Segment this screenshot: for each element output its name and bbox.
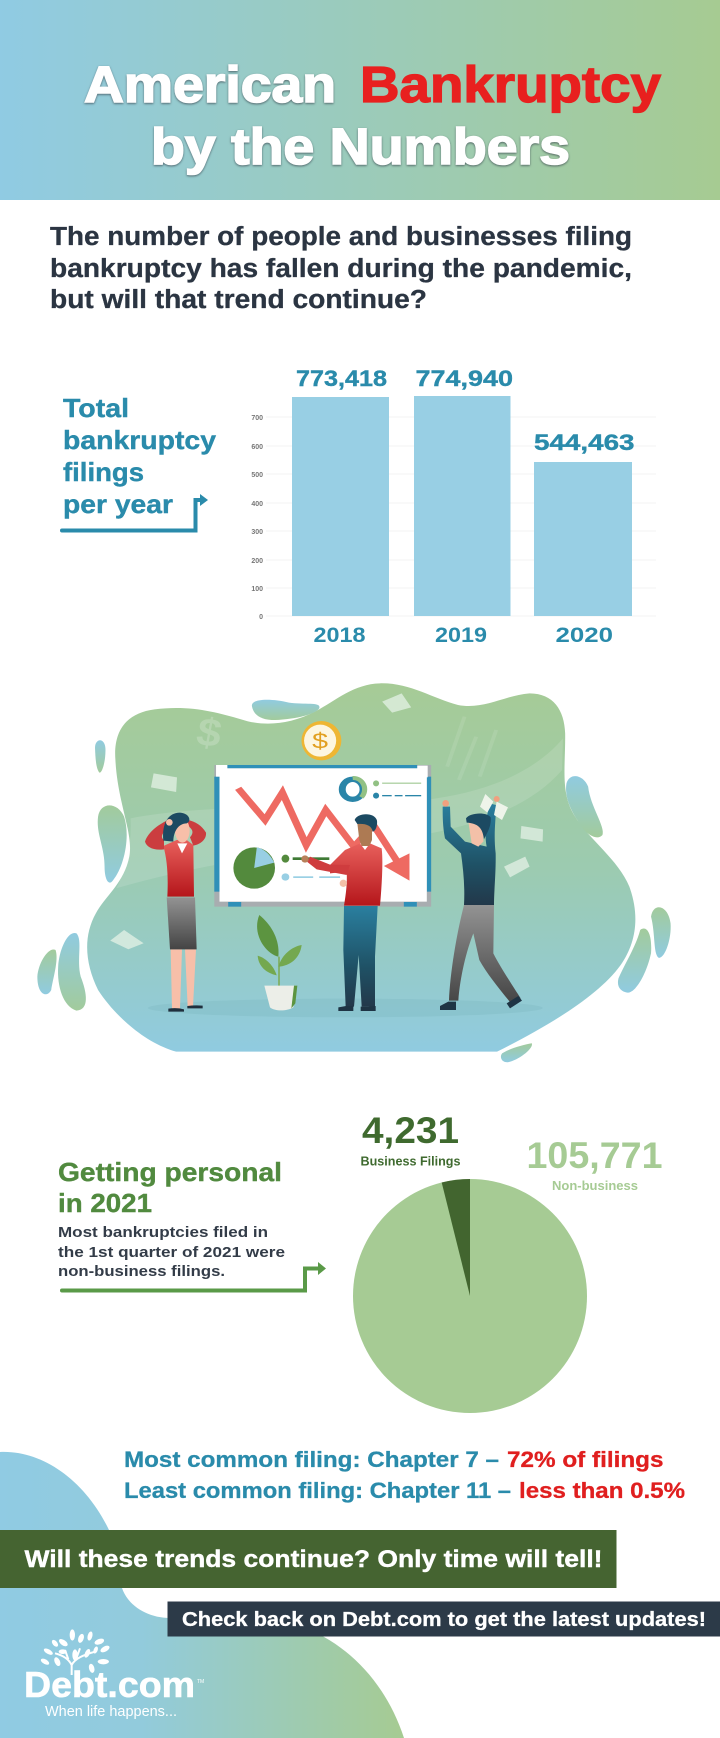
year labels: 2019 bbox=[435, 623, 487, 647]
description: non-business filings. bbox=[58, 1263, 225, 1280]
icon: tree bbox=[40, 1629, 111, 1675]
bar 2018 bbox=[292, 397, 389, 616]
logo: Debt.com bbox=[24, 1629, 204, 1720]
y axis labels: 700 bbox=[251, 415, 263, 422]
background blob bbox=[87, 683, 635, 1052]
y axis labels: 200 bbox=[251, 558, 263, 565]
bar values: 544,463 bbox=[534, 430, 634, 455]
chart label: total bankruptcy filings per year: bankruptcy bbox=[63, 425, 217, 455]
man with raised arms bbox=[440, 794, 522, 1010]
whiteboard bbox=[214, 765, 431, 907]
scene background and whiteboard bbox=[37, 683, 671, 1062]
presenter man bbox=[330, 814, 382, 1011]
coin: $ bbox=[312, 730, 328, 754]
pie label: getting personal in 2021 bbox=[58, 1157, 285, 1280]
donut chart bbox=[342, 778, 365, 799]
year labels: 2018 bbox=[314, 623, 366, 647]
y axis labels: 0 bbox=[259, 614, 263, 621]
y axis labels: 400 bbox=[251, 501, 263, 508]
chapter statistics: less than 0.5% bbox=[519, 1478, 685, 1503]
chart label: total bankruptcy filings per year: filings bbox=[63, 457, 144, 487]
y axis labels: 500 bbox=[251, 472, 263, 479]
title bbox=[84, 56, 662, 175]
heading: Getting personal bbox=[58, 1157, 282, 1187]
year labels bbox=[314, 623, 613, 647]
business slice bbox=[442, 1179, 470, 1296]
y axis labels bbox=[251, 415, 263, 621]
green banner: Will these trends continue? Only time will tell! bbox=[24, 1546, 602, 1573]
title: Bankruptcy bbox=[360, 56, 662, 113]
y axis labels: 100 bbox=[251, 586, 263, 593]
y axis labels: 300 bbox=[251, 529, 263, 536]
y axis labels: 600 bbox=[251, 444, 263, 451]
falling papers bbox=[110, 693, 543, 949]
wordmark: Debt.com bbox=[24, 1664, 195, 1705]
green banner bbox=[0, 1530, 616, 1588]
bar values: 774,940 bbox=[416, 366, 513, 391]
bar 2019 bbox=[414, 396, 510, 616]
floor shadow bbox=[148, 999, 543, 1017]
label: business filings: Business Filings bbox=[360, 1154, 461, 1168]
arrow: to pie chart bbox=[62, 1262, 326, 1290]
label: business filings: 4,231 bbox=[362, 1110, 459, 1151]
chart label: total bankruptcy filings per year: per year bbox=[63, 489, 173, 519]
description: Most bankruptcies filed in bbox=[58, 1224, 268, 1241]
tagline: When life happens... bbox=[45, 1703, 177, 1720]
bar values bbox=[296, 366, 634, 455]
header banner bbox=[0, 0, 720, 200]
pie chart bbox=[233, 847, 275, 889]
intro text: The number of people and businesses filing bbox=[50, 223, 632, 251]
illustration: team reacting to falling chart bbox=[37, 683, 671, 1062]
label: non-business bbox=[526, 1135, 662, 1193]
intro text: bankruptcy has fallen during the pandemic, bbox=[50, 255, 632, 283]
intro text: but will that trend continue? bbox=[50, 286, 427, 314]
arrow: to bar chart bbox=[62, 494, 208, 530]
faint dollar sign: $ bbox=[193, 710, 225, 756]
woman bbox=[145, 813, 206, 1012]
chapter statistics: Least common filing: Chapter 11 – bbox=[124, 1478, 511, 1503]
title: by the Numbers bbox=[151, 118, 570, 175]
title: American bbox=[84, 56, 336, 113]
label: non-business: 105,771 bbox=[526, 1135, 662, 1176]
bar chart bbox=[251, 366, 656, 647]
label: business filings bbox=[360, 1110, 461, 1168]
footer background shape bbox=[0, 1452, 404, 1738]
intro text bbox=[50, 223, 632, 314]
chart label: total bankruptcy filings per year bbox=[63, 393, 217, 519]
light band bbox=[116, 738, 563, 888]
bar 2020 bbox=[534, 462, 632, 616]
side shapes bbox=[37, 700, 671, 1062]
chart label: total bankruptcy filings per year: Total bbox=[63, 393, 129, 423]
bar values: 773,418 bbox=[296, 366, 387, 391]
chapter statistics: 72% of filings bbox=[507, 1447, 664, 1472]
falling trend line bbox=[238, 788, 397, 862]
dark banner: Check back on Debt.com to get the latest updates! bbox=[182, 1609, 706, 1631]
trademark: TM bbox=[197, 1679, 204, 1685]
plant bbox=[257, 915, 302, 1010]
heading bbox=[58, 1157, 282, 1218]
label: non-business: Non-business bbox=[552, 1179, 638, 1193]
heading: in 2021 bbox=[58, 1188, 152, 1218]
presenter arm and pointer bbox=[293, 855, 350, 875]
pie chart bbox=[353, 1179, 587, 1413]
chapter statistics: Most common filing: Chapter 7 – bbox=[124, 1447, 499, 1472]
year labels: 2020 bbox=[556, 623, 613, 647]
faint down arrows bbox=[447, 717, 496, 780]
legend marks bbox=[282, 780, 421, 881]
coin bbox=[301, 721, 341, 760]
description: the 1st quarter of 2021 were bbox=[58, 1244, 285, 1261]
chapter statistics bbox=[124, 1447, 685, 1503]
description bbox=[58, 1224, 285, 1280]
dark banner bbox=[168, 1602, 720, 1636]
